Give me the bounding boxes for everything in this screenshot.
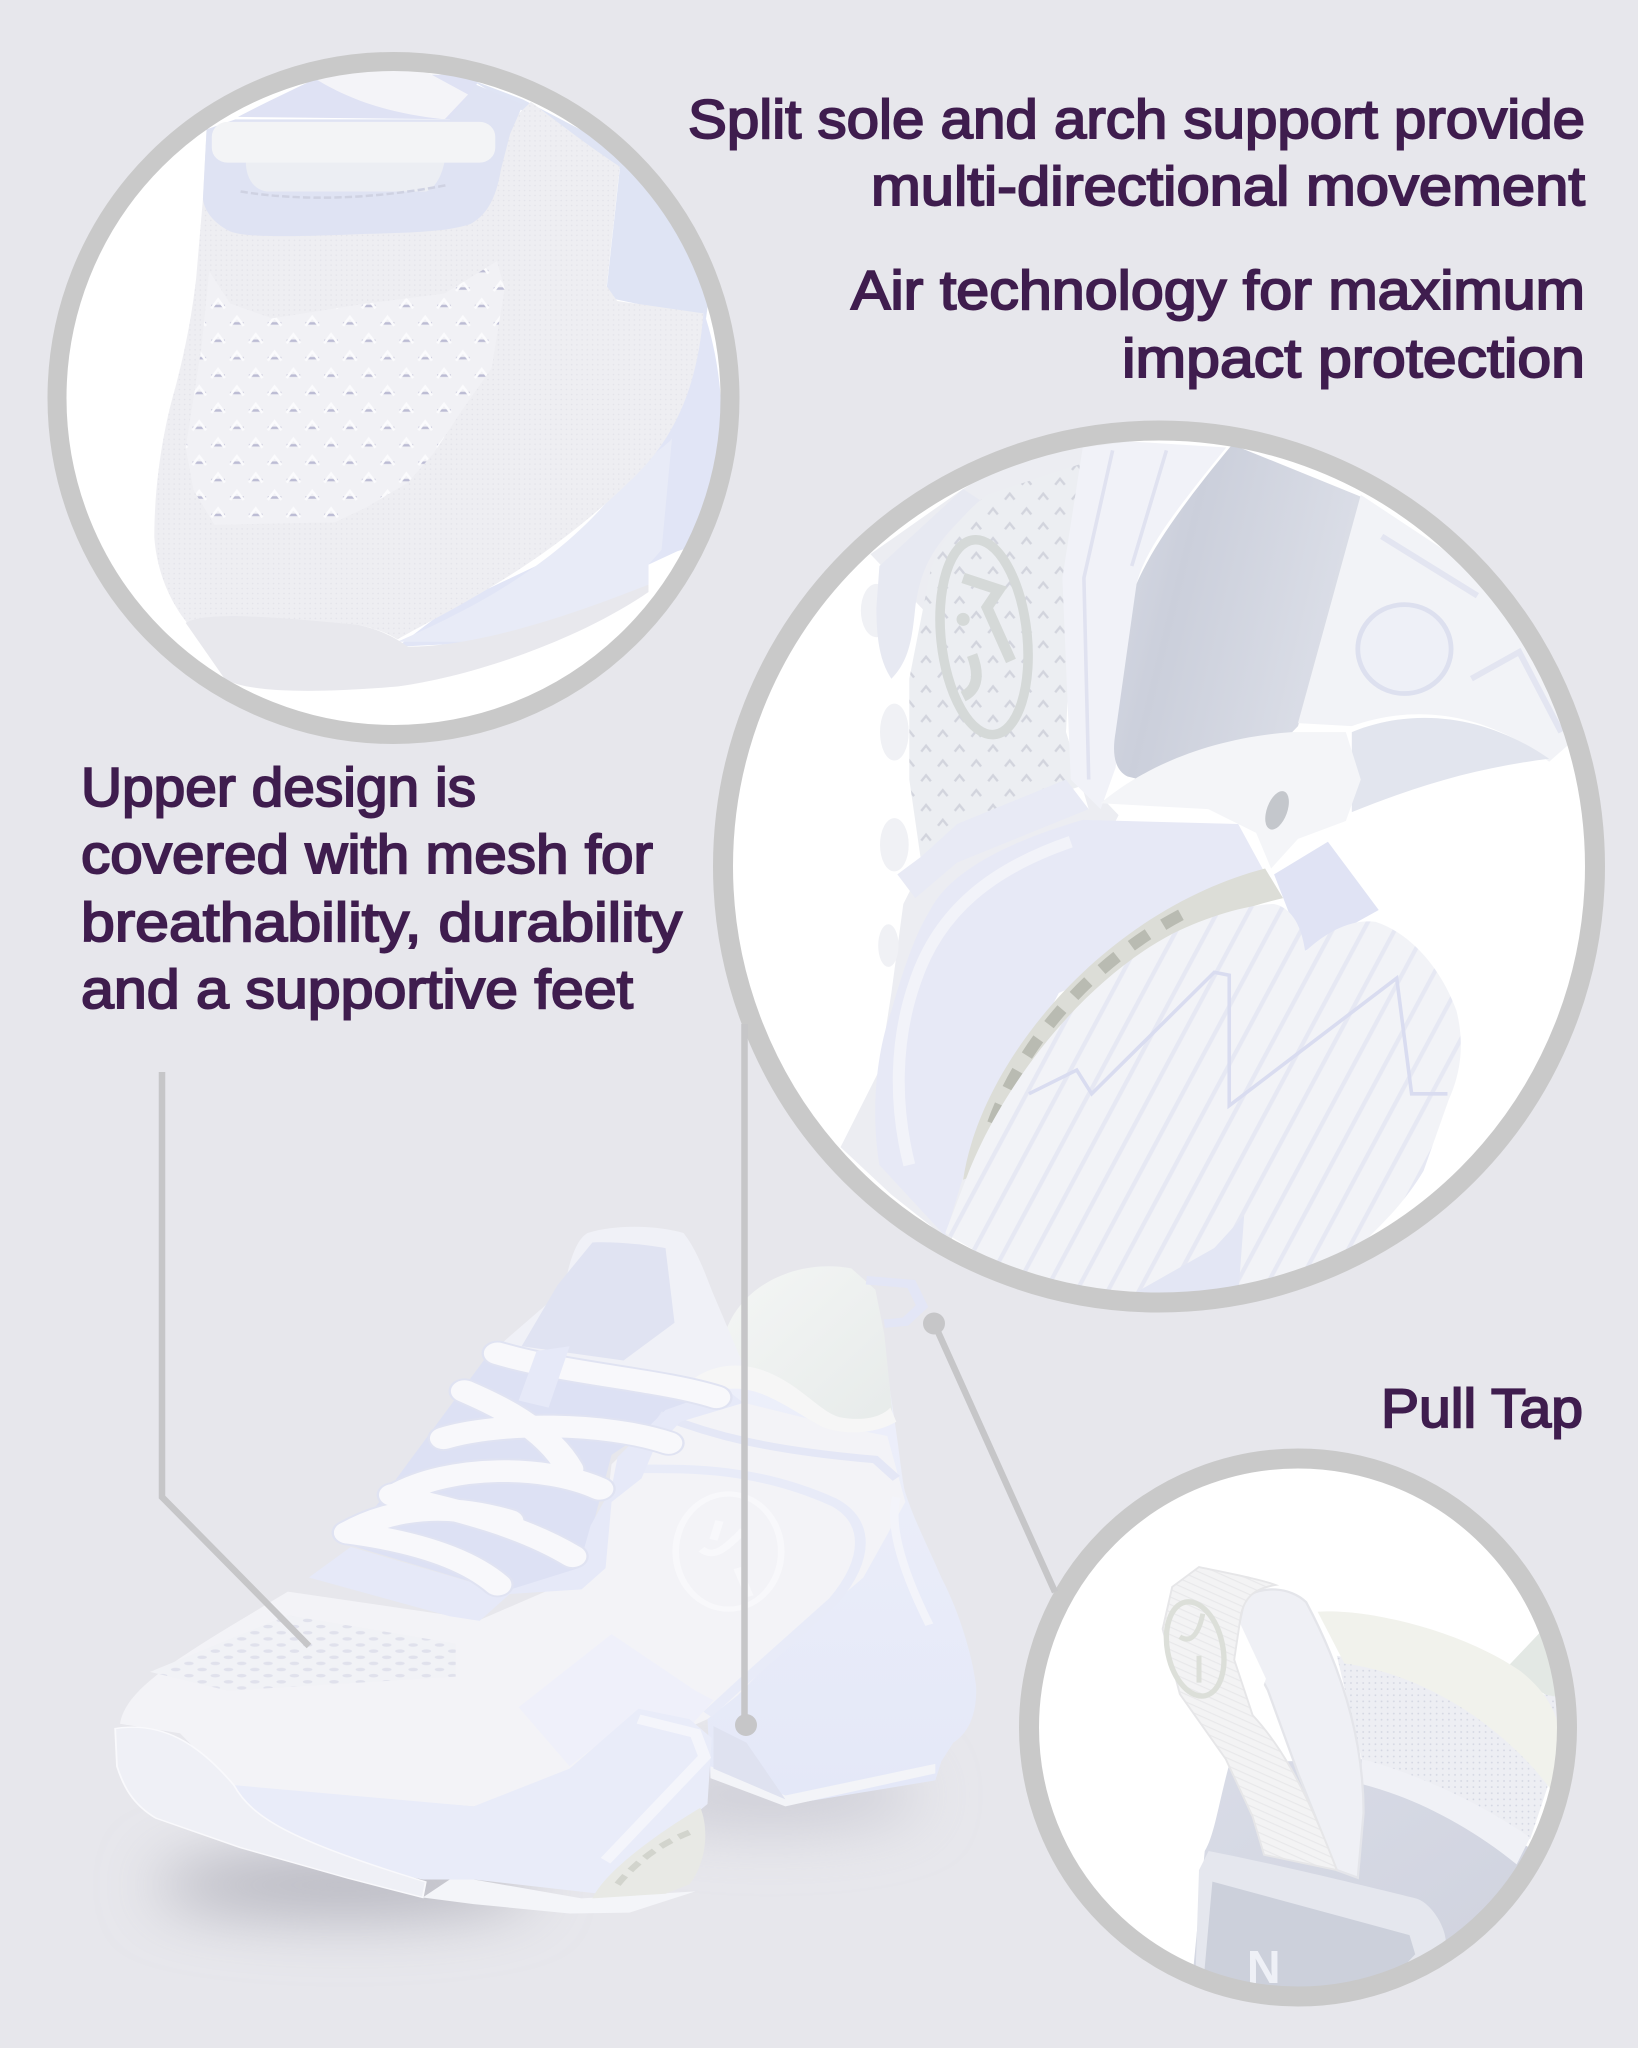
inner collar: [725, 1266, 893, 1422]
heading: air technology feature: impact protection: [1122, 327, 1585, 389]
ring: [723, 430, 1595, 1302]
lavender wedge: [1274, 842, 1379, 951]
collar rim: [1062, 442, 1226, 809]
grey arch panel: [1114, 444, 1364, 800]
heading: upper design feature: covered with mesh for: [81, 823, 653, 885]
perforated knit: [909, 464, 1080, 857]
tongue strap: [519, 1346, 570, 1408]
heading: split sole feature: Split sole and arch support provide: [688, 88, 1585, 150]
lace eyelets: [861, 584, 909, 967]
heading: upper design feature: breathability, durability: [81, 891, 683, 953]
perforated mesh panel: [186, 261, 505, 525]
heel wedge: [707, 1332, 976, 1805]
foam collar: [690, 1366, 896, 1432]
heading: air technology feature: [851, 259, 1585, 389]
logo emblem: [931, 535, 1037, 739]
plate letter: N: [1247, 1941, 1281, 1993]
heading: split sole feature: multi-directional movement: [871, 155, 1585, 217]
photo: pull tab close-up: [1030, 1460, 1570, 2000]
rear logo panel outline: [624, 1469, 860, 1714]
midsole wedge: [397, 311, 722, 647]
sole bottom: [423, 1880, 695, 1914]
ring: [1029, 1458, 1567, 1996]
heading: upper design feature: and a supportive feet: [81, 958, 633, 1020]
strap hole: [1234, 1621, 1266, 1715]
plate inner: [1203, 1882, 1415, 1989]
heel behind: [1510, 1634, 1555, 1696]
outsole groove line: [1029, 972, 1448, 1106]
toe perforation: [150, 1615, 456, 1691]
strap logo: [1158, 1596, 1232, 1701]
forefoot midsole: [234, 1709, 712, 1894]
strap front: [1163, 1567, 1337, 1870]
toe bumper: [186, 585, 649, 691]
air bubble: [592, 1808, 705, 1898]
panel: toe mesh detail circle: [40, 40, 760, 760]
ground shadow: [155, 1765, 920, 1915]
heel rim: [877, 820, 1262, 1106]
front lace: [212, 122, 495, 163]
mesh: [1337, 1656, 1563, 1839]
outsole: [945, 904, 1461, 1307]
lavender band: [897, 780, 1089, 898]
heading: upper design feature: Upper design is: [81, 756, 476, 818]
heading: upper design feature: [81, 756, 683, 1020]
heading: pull tap: Pull Tap: [1381, 1377, 1583, 1439]
air unit: [963, 868, 1283, 1180]
photo: heel and outsole close-up: [720, 430, 1600, 1310]
heel gap shade: [713, 1726, 785, 1799]
arch cut-out: [1141, 1216, 1244, 1292]
shank connector: [1101, 732, 1361, 868]
knit upper: [841, 439, 1131, 1242]
forefoot outsole: [1298, 495, 1576, 762]
strap back: [1237, 1589, 1364, 1878]
inner tongue shade: [348, 1342, 690, 1592]
panel: pull tab detail circle: [1029, 1458, 1570, 2000]
knit upper: [154, 102, 703, 639]
connector: sole line with dot: [735, 1024, 757, 1736]
heel body: [1194, 1759, 1528, 1966]
toe bumper: [115, 1727, 426, 1897]
eyestay: [309, 1389, 743, 1621]
top laces and tongue: [238, 75, 481, 119]
pull tab: [866, 1280, 922, 1324]
heel sole edge: [710, 1764, 935, 1806]
connector: upper mesh line: [162, 1072, 309, 1646]
side overlay: [471, 80, 711, 318]
rim overlay: [1362, 1759, 1530, 1864]
logo emblem: [676, 1494, 781, 1609]
photo: shoe toe close-up: [66, 71, 720, 725]
forefoot underside: [1352, 718, 1549, 812]
eyestay edge: [876, 565, 916, 678]
eyestay: [203, 85, 523, 236]
connector: pull tab line with dot: [923, 1312, 1055, 1592]
heading: split sole feature: [688, 88, 1585, 217]
panel: sole and air unit detail circle: [720, 430, 1600, 1310]
tongue: [504, 1227, 743, 1398]
collar lining: [1318, 1611, 1559, 1790]
heading: air technology feature: Air technology for maximum: [851, 259, 1585, 321]
main upper: [120, 1398, 905, 1806]
laces: [348, 1353, 716, 1585]
ring: [57, 62, 730, 734]
side panel: [519, 1634, 713, 1766]
image: main shoe: [115, 1227, 976, 1915]
plate frame: [1196, 1851, 1446, 1969]
